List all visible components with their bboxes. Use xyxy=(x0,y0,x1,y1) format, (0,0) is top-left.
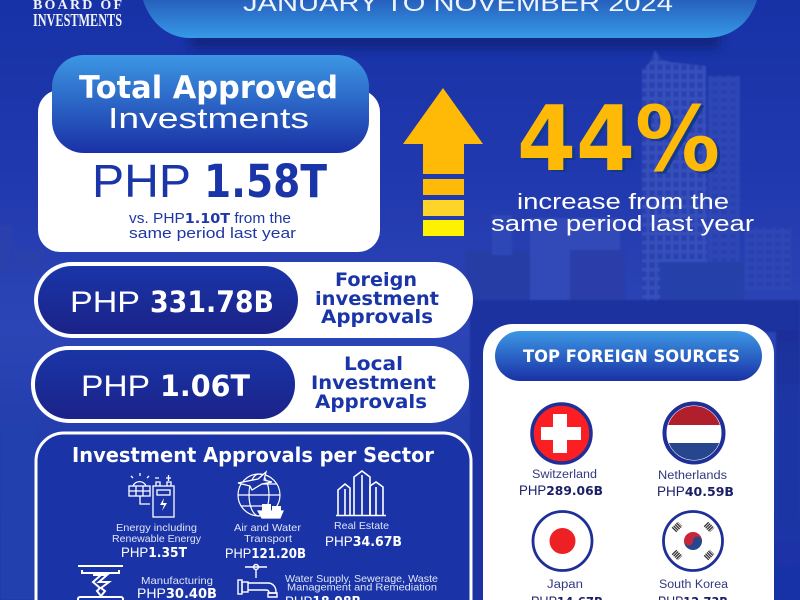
logo: Board of Investments xyxy=(33,0,122,30)
44 percent stat xyxy=(491,87,755,236)
source: Netherlands: PHP40.59B xyxy=(657,484,734,499)
source: Netherlands xyxy=(657,400,734,499)
foreign label: Foreign xyxy=(335,269,417,291)
sector: energy: Energy including xyxy=(116,522,197,534)
sector: real estate xyxy=(325,471,402,550)
sector: real estate: PHP34.67B xyxy=(325,533,402,550)
panel: investment approvals per sector xyxy=(36,433,471,600)
heading pill xyxy=(52,55,369,153)
comparison note: vs. PHP 1.10T from the xyxy=(129,211,291,227)
flag: Switzerland xyxy=(532,404,591,463)
source: Japan: Japan xyxy=(547,579,583,591)
icon: globe with plane and ship xyxy=(238,472,283,518)
panel: top foreign sources xyxy=(483,324,774,600)
icon: solar panel and battery xyxy=(129,473,174,517)
banner shadow xyxy=(190,30,720,48)
increase note xyxy=(491,189,755,236)
panel: foreign investment approvals: 331.78B xyxy=(150,285,274,319)
flag: South Korea xyxy=(664,512,722,570)
panel: total approved investments xyxy=(38,55,380,252)
icon: faucet xyxy=(238,564,277,597)
panel: local investment approvals xyxy=(31,346,469,423)
flag: Netherlands xyxy=(662,402,726,464)
sector: manufacturing: Manufacturing xyxy=(141,575,213,587)
source: South Korea xyxy=(658,512,729,600)
sector: air and water transport: Transport xyxy=(244,533,292,545)
source: Switzerland: Switzerland xyxy=(532,469,597,481)
icon: 3D printer xyxy=(78,566,123,600)
44 percent stat: 44% xyxy=(520,89,723,194)
sector: manufacturing xyxy=(78,566,217,600)
source: Switzerland xyxy=(519,404,603,498)
heading pill: Total Approved xyxy=(79,70,338,106)
foreign label: investment xyxy=(315,288,439,310)
total value: 1.58T xyxy=(204,155,327,208)
heading pill: Investments xyxy=(108,103,309,135)
sector: energy xyxy=(112,473,202,561)
heading pill: TOP FOREIGN SOURCES xyxy=(523,347,740,366)
foreign label xyxy=(315,269,439,328)
logo: Board of Investments: INVESTMENTS xyxy=(33,10,122,30)
foreign label: Approvals xyxy=(321,306,433,328)
sector: water supply: Water Supply, Sewerage, Waste xyxy=(285,573,438,585)
sector: energy: PHP1.35T xyxy=(121,544,187,561)
44 percent stat: 44% xyxy=(517,87,720,192)
sector: air and water transport: PHP121.20B xyxy=(225,545,306,562)
flag: Japan xyxy=(533,512,592,570)
comparison note xyxy=(129,211,296,242)
heading pill xyxy=(495,331,762,381)
source: Netherlands: Netherlands xyxy=(658,470,727,482)
panel: local investment approvals: 1.06T xyxy=(160,369,250,403)
source: Switzerland: PHP289.06B xyxy=(519,483,603,498)
local label: Approvals xyxy=(315,391,427,413)
increase note: same period last year xyxy=(491,211,755,236)
local label: Local xyxy=(344,353,403,375)
sector: water supply xyxy=(238,564,438,600)
header banner xyxy=(143,0,757,38)
icon: up arrow xyxy=(403,88,483,236)
sector: real estate: Real Estate xyxy=(334,520,389,532)
icon: buildings xyxy=(336,471,386,516)
total value: PHP xyxy=(92,155,191,207)
sector: energy: Renewable Energy xyxy=(112,533,202,545)
increase note: increase from the xyxy=(517,189,729,214)
panel: local investment approvals: PHP xyxy=(81,370,150,403)
total value xyxy=(92,155,327,208)
source: South Korea: South Korea xyxy=(659,579,729,591)
sector heading: Investment Approvals per Sector xyxy=(72,443,434,467)
comparison note: same period last year xyxy=(129,226,296,242)
sector: water supply: Management and Remediation xyxy=(287,582,437,594)
panel: foreign investment approvals: PHP xyxy=(70,286,140,319)
local label xyxy=(311,353,436,413)
panel: foreign investment approvals xyxy=(34,262,473,338)
source: Japan xyxy=(531,512,603,600)
sector: air and water transport: Air and Water xyxy=(234,522,302,534)
sector: air and water transport xyxy=(225,472,306,562)
local label: Investment xyxy=(311,372,436,394)
